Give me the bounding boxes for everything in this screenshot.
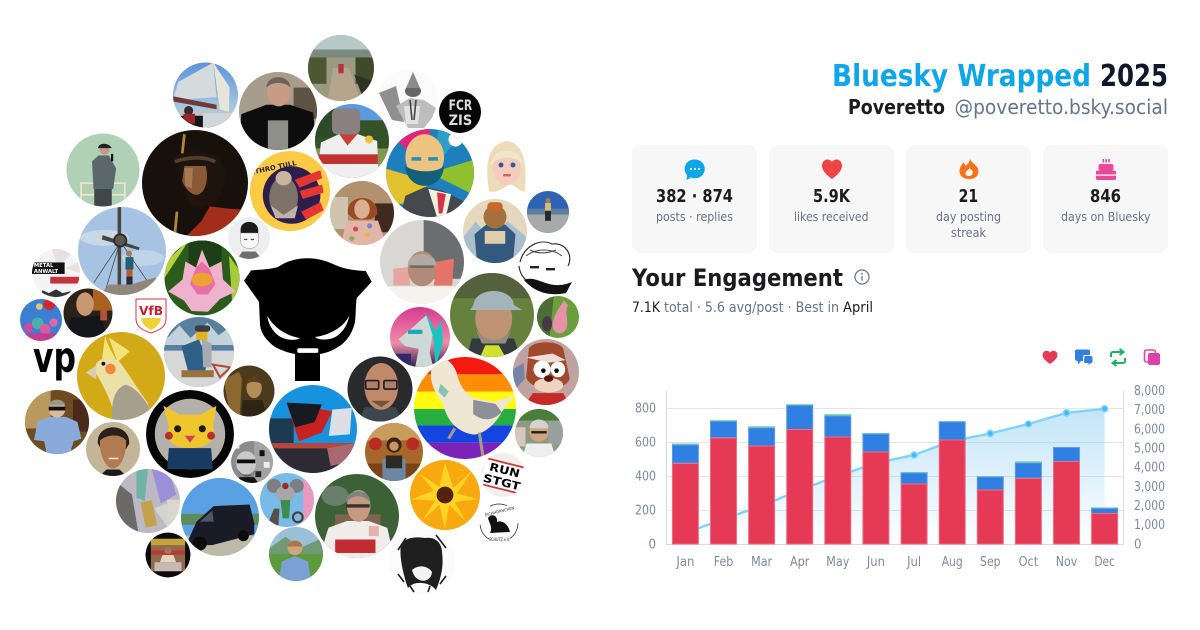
avatar: pink water lily — [164, 240, 240, 316]
right axis labels: 3,000 — [1134, 480, 1165, 495]
month labels: Apr — [790, 555, 810, 570]
month labels: Nov — [1056, 555, 1077, 570]
icon: likes heart — [1043, 351, 1057, 364]
icon: cake — [1096, 159, 1116, 180]
avatar: squirrel protection badge — [480, 504, 518, 542]
avatar: FCR badge: ZIS — [449, 113, 472, 129]
right axis labels: 4,000 — [1134, 461, 1165, 476]
left axis labels: 600 — [635, 436, 656, 450]
right axis labels: 8,000 — [1134, 384, 1165, 399]
avatar: anime sketch — [519, 242, 572, 294]
month labels: Sep — [980, 555, 1001, 570]
left axis labels: 200 — [635, 504, 656, 518]
avatar: man with sunglasses black and white — [231, 441, 273, 483]
avatar: neon unicorn — [390, 307, 450, 367]
avatar: woman in floral dress — [330, 181, 394, 245]
engagement summary text: 7.1K — [632, 300, 661, 316]
avatar: old man sketch — [378, 70, 438, 130]
avatar: blonde memoji — [487, 141, 526, 192]
avatar: FCR badge: FCR — [449, 98, 472, 114]
stat card: days on Bluesky: days on Bluesky — [1061, 210, 1151, 225]
avatar: vp logo: vp — [33, 333, 76, 382]
avatar: smiling man portrait — [86, 422, 140, 476]
avatar: sailboat — [173, 62, 238, 128]
avatar: guitar close-up — [116, 469, 180, 533]
avatar: painting of Christ — [142, 130, 248, 236]
stat card: posting streak: streak — [951, 226, 987, 241]
avatar: man in black t-shirt — [239, 72, 317, 150]
icon: reposts arrows — [1111, 349, 1125, 366]
month labels: May — [826, 555, 849, 570]
avatar: graffiti mouse — [260, 473, 314, 527]
avatar: lego figure in snow — [164, 317, 234, 387]
icon: info — [855, 270, 869, 284]
stat card: posting streak — [906, 145, 1031, 253]
stat card: likes received: 5.9K — [813, 186, 851, 207]
stat card: likes received: likes received — [794, 210, 868, 225]
avatar: fan flag crowd — [269, 385, 357, 477]
avatar: selfie with white cap — [515, 409, 563, 457]
icon: chat bubble — [685, 159, 705, 180]
month labels: Jan — [676, 555, 694, 570]
avatar: VfB Stuttgart crest: VfB — [139, 304, 163, 318]
month labels: Jul — [906, 555, 921, 570]
avatar: pergola path — [308, 35, 374, 101]
month labels: Feb — [714, 555, 733, 570]
avatar: cockatiel on rainbow flag — [414, 357, 516, 459]
avatar: FCR badge — [439, 91, 481, 133]
avatar: balloons — [20, 298, 62, 341]
avatar: Metal Anwalt logo — [32, 249, 80, 297]
avatar: chipmunk cartoon — [513, 339, 579, 405]
avatar: squirrel protection badge: EICHHÖRNCHEN — [484, 505, 515, 517]
avatar cluster — [20, 35, 579, 595]
avatar: black scribble face — [389, 529, 455, 595]
heading: Your Engagement: Your Engagement — [631, 264, 843, 292]
stat card: days on Bluesky — [1043, 145, 1168, 253]
avatar: VfB Stuttgart crest — [136, 299, 166, 333]
avatar: seated person in blue shirt — [25, 390, 89, 454]
month labels: Oct — [1019, 555, 1038, 570]
chart legend — [1043, 349, 1160, 366]
left axis labels — [635, 402, 656, 552]
right axis labels: 5,000 — [1134, 442, 1165, 456]
left axis labels: 0 — [648, 538, 656, 552]
right axis labels: 0 — [1134, 538, 1142, 552]
bars: likes — [672, 430, 1118, 544]
avatar: Metal Anwalt logo: ANWALT — [34, 269, 59, 275]
cumulative line — [685, 409, 1105, 533]
avatar: squirrel protection badge: SCHUTZ e.V. — [489, 537, 510, 542]
avatar: man with drink — [64, 288, 112, 338]
bars: reposts and quotes — [672, 404, 1118, 509]
right axis labels — [1134, 384, 1165, 552]
central logo: black panther mask — [244, 258, 372, 381]
left axis labels: 400 — [635, 470, 656, 484]
icon: replies speech bubbles — [1075, 350, 1093, 366]
avatar: cat mask in football shirt — [315, 104, 389, 178]
left axis labels: 800 — [635, 402, 656, 416]
month labels — [676, 555, 1115, 570]
bars: replies — [672, 406, 1118, 514]
month labels: Aug — [942, 555, 963, 570]
header: title: Bluesky Wrapped — [832, 59, 1091, 94]
avatar: flamingo — [537, 296, 579, 338]
header: title: 2025 — [1100, 59, 1168, 94]
avatar: man in selfie with pink shirt — [380, 220, 464, 304]
avatar: man in blue shirt on terrace — [269, 527, 323, 581]
chart: monthly engagement stacked bars with cumulative line — [635, 384, 1165, 570]
avatar: capybara in parka — [463, 199, 527, 263]
avatar: RUN STGT sign: RUN — [488, 460, 521, 480]
avatar: cockatiel on yellow — [77, 332, 165, 420]
right axis labels: 6,000 — [1134, 422, 1165, 437]
cumulative area — [685, 409, 1105, 544]
right axis labels: 7,000 — [1134, 403, 1165, 418]
avatar: yellow flower — [410, 460, 480, 530]
header: user name and handle: Poveretto — [848, 95, 945, 119]
avatar: black van — [181, 478, 259, 556]
stat card: posting streak: 21 — [959, 186, 978, 207]
avatar: RUN STGT sign: STGT — [482, 471, 522, 493]
avatar: smiling bald man with glasses — [348, 356, 412, 422]
icon: quotes copy squares — [1144, 350, 1160, 365]
avatar: man at desk in black ring — [146, 532, 190, 578]
avatar: summit cross — [78, 207, 166, 295]
avatar: man in VfB jersey — [315, 474, 399, 558]
month labels: Mar — [751, 555, 773, 570]
avatar: comic bald man — [386, 129, 474, 217]
right axis labels: 2,000 — [1134, 499, 1165, 514]
avatar: Metal Anwalt logo: METAL — [34, 263, 54, 269]
engagement summary text: total · 5.6 avg/post · Best in — [664, 300, 839, 316]
avatar: Jethro Tull poster: JETHRO TULL — [246, 159, 298, 178]
avatar: Rolling Stones poster — [365, 423, 423, 481]
stat card: likes received — [769, 145, 894, 253]
header: user name and handle: @poveretto.bsky.social — [954, 95, 1168, 119]
avatar: hiker on mountain — [527, 191, 569, 233]
right axis labels: 1,000 — [1134, 518, 1165, 533]
header: user name and handle — [848, 95, 1168, 119]
stat card: posting streak: day posting — [936, 210, 1001, 225]
avatar: man in green landscape — [66, 134, 140, 208]
avatar: man in cap outdoors — [450, 273, 534, 357]
engagement summary text: April — [843, 300, 873, 316]
stat card: days on Bluesky: 846 — [1090, 186, 1121, 207]
month labels: Jun — [866, 555, 885, 570]
month labels: Dec — [1094, 555, 1115, 570]
icon: flame — [960, 158, 978, 179]
stat card: posts and replies: posts · replies — [656, 210, 733, 225]
avatar: RUN STGT sign — [481, 453, 524, 497]
stat card: posts and replies: 382 · 874 — [656, 186, 733, 207]
avatar: man and giraffe painting — [224, 366, 274, 416]
avatar: Pikachu in black ring — [146, 390, 234, 478]
icon: heart — [822, 160, 842, 179]
stat card: posts and replies — [632, 145, 757, 253]
avatar: Jethro Tull poster — [246, 151, 330, 231]
avatar: beanie sketch — [228, 217, 270, 259]
